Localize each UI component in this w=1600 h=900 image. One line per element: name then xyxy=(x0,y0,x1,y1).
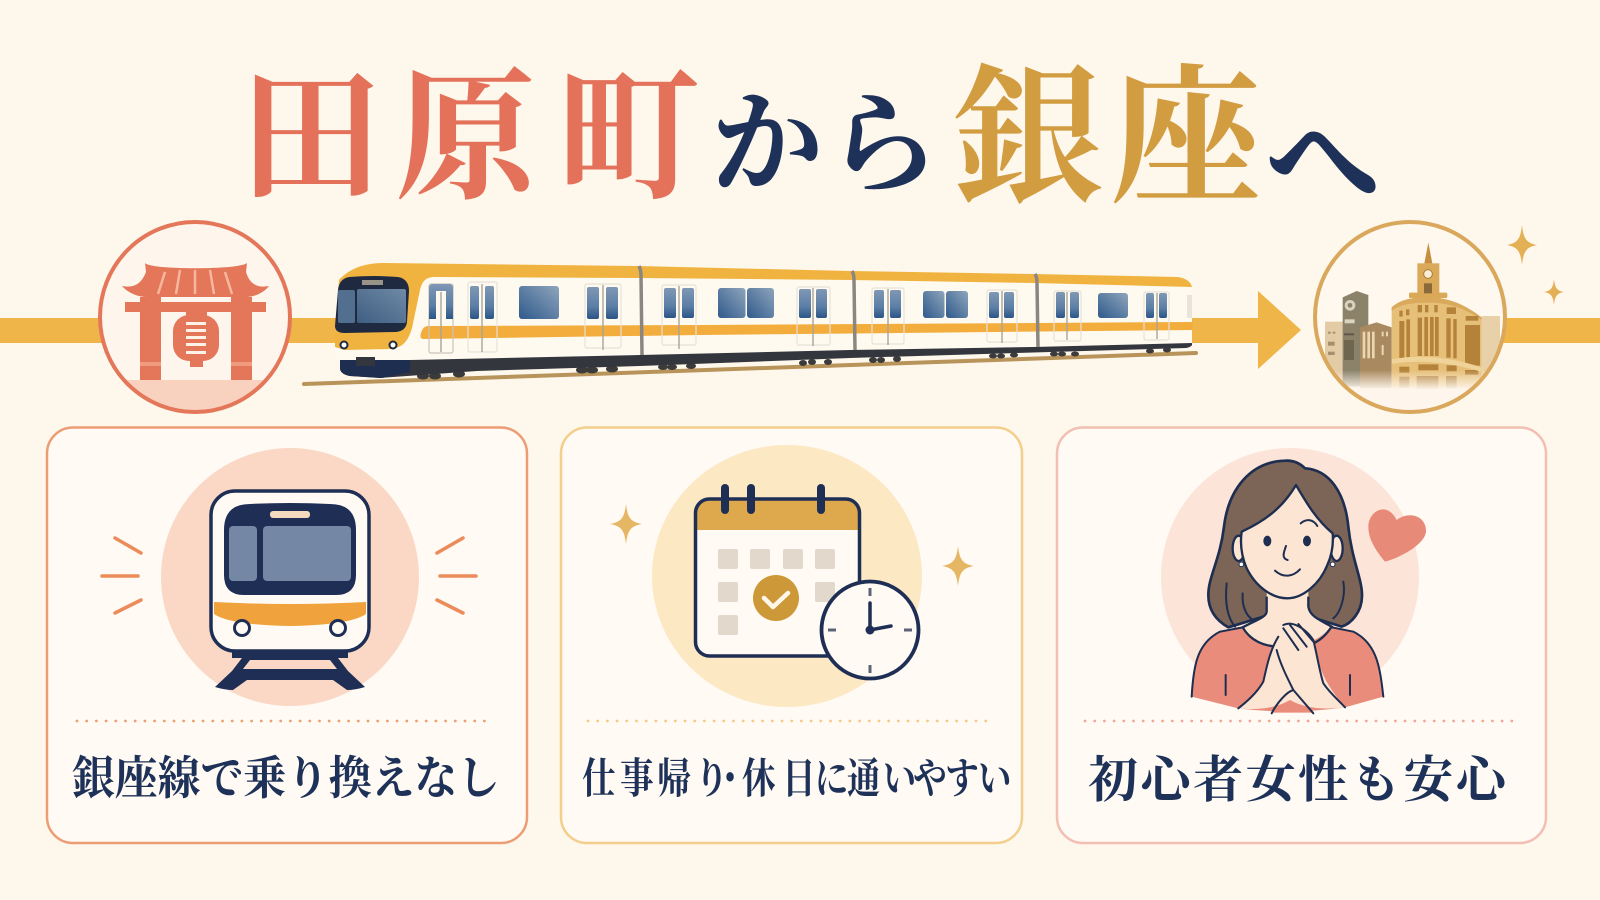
title: particle he: へ xyxy=(1266,99,1380,226)
dotted divider xyxy=(588,720,995,722)
title: particle kara: から xyxy=(711,84,939,208)
windshield xyxy=(335,276,409,333)
dotted divider xyxy=(77,720,492,722)
dotted divider xyxy=(1085,720,1514,722)
bogies xyxy=(417,348,1171,380)
title xyxy=(240,57,1380,226)
coupler xyxy=(356,357,375,366)
rail xyxy=(304,353,1196,384)
icon: Tawaramachi gate xyxy=(98,220,292,414)
icon: sparkle large xyxy=(1507,225,1537,265)
label: 仕事帰り・休日に通いやすい xyxy=(582,757,1012,803)
panel: direct line xyxy=(47,428,527,843)
icon: calendar xyxy=(696,488,860,656)
windows xyxy=(429,284,1167,319)
panel: easy commute xyxy=(561,428,1022,843)
door centre lines xyxy=(441,284,1157,352)
end panel xyxy=(1187,295,1192,318)
icon background circle xyxy=(1161,448,1419,706)
panel: beginners xyxy=(1057,428,1546,843)
icon: Ginza building xyxy=(1315,222,1507,420)
icon: sparkle small xyxy=(1544,279,1564,305)
icon background circle xyxy=(652,445,922,707)
icon background circle xyxy=(161,448,419,706)
car gangways xyxy=(639,266,1038,355)
underframe xyxy=(340,342,1192,378)
roof band and nose xyxy=(335,263,1192,350)
icon: train front xyxy=(211,491,369,690)
car body xyxy=(335,263,1192,360)
icon: clock xyxy=(822,582,918,678)
train xyxy=(304,263,1196,384)
icon: sparkle left xyxy=(610,504,642,544)
arrow xyxy=(1258,291,1301,369)
label: 初心者女性も安心 xyxy=(1088,752,1513,808)
icon: heart xyxy=(1368,509,1426,562)
icon: woman xyxy=(1192,461,1383,713)
side stripe xyxy=(420,322,1193,339)
headlights xyxy=(340,342,348,348)
signal rays xyxy=(102,538,476,613)
route line xyxy=(0,318,1600,343)
title: destination: 銀座 xyxy=(953,57,1267,223)
icon: sparkle right xyxy=(942,546,974,586)
door frames xyxy=(429,282,1169,353)
title: origin station: 田原町 xyxy=(240,60,699,218)
label: 銀座線で乗り換えなし xyxy=(72,753,500,804)
